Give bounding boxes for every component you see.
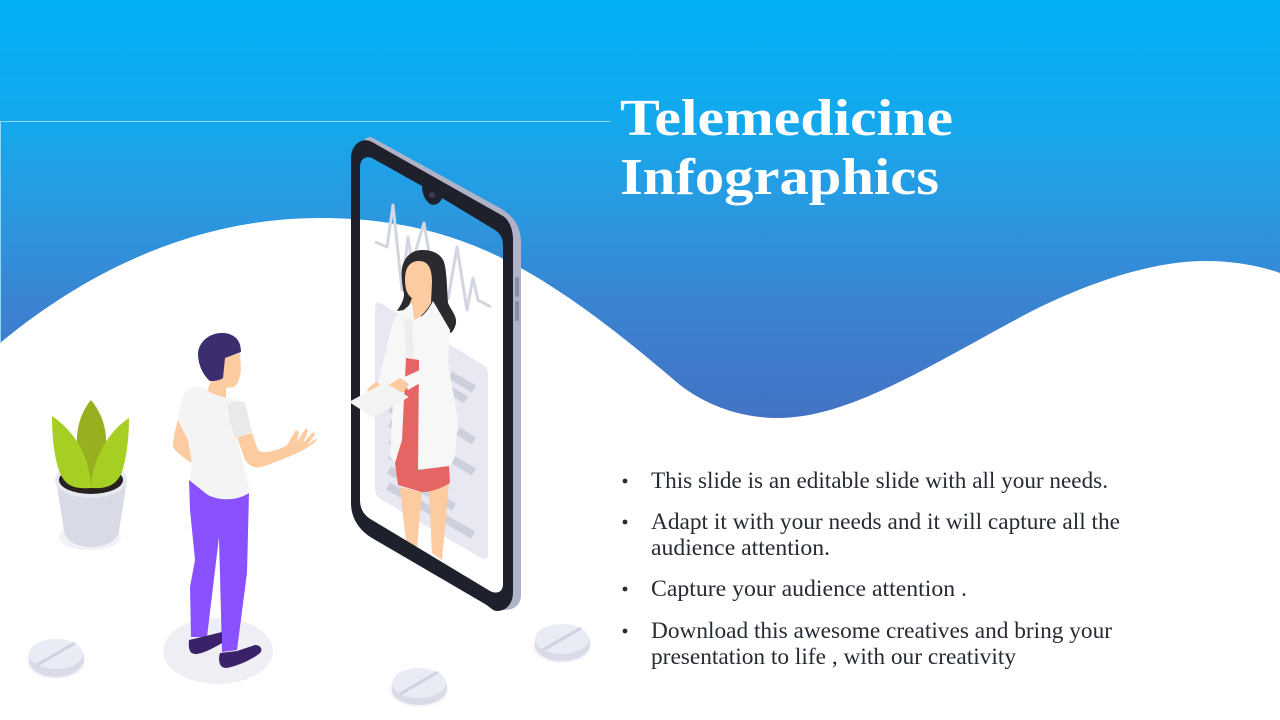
bullet list: This slide is an editable slide with all your needs. [651,468,1108,493]
bullet list: Download this awesome creatives and bring your [651,618,1112,643]
phone side buttons [515,277,519,321]
icon: pill right [533,624,591,663]
ECG line [375,205,491,310]
bullet list: Adapt it with your needs and it will capture all the [651,509,1120,534]
bullet list: presentation to life , with our creativity [651,644,1017,669]
clipboard [350,383,408,417]
icon: pill middle [390,668,448,707]
man figure [163,333,317,684]
doctor figure [367,250,458,560]
title line 2: Infographics [620,149,939,206]
bullet list: audience attention. [651,535,830,560]
phone body [364,137,521,610]
phone dark frame [351,140,513,611]
blue gradient header background [0,0,1280,420]
icon: pill left [27,639,85,679]
document panel behind doctor [375,303,488,559]
bullet list: Capture your audience attention . [651,576,967,601]
white wave [0,218,1280,720]
title: Telemedicine [620,90,953,147]
icon: potted plant [52,400,129,550]
thin frame line [0,122,611,343]
phone camera notch [429,192,435,198]
bullet list [623,468,1120,669]
